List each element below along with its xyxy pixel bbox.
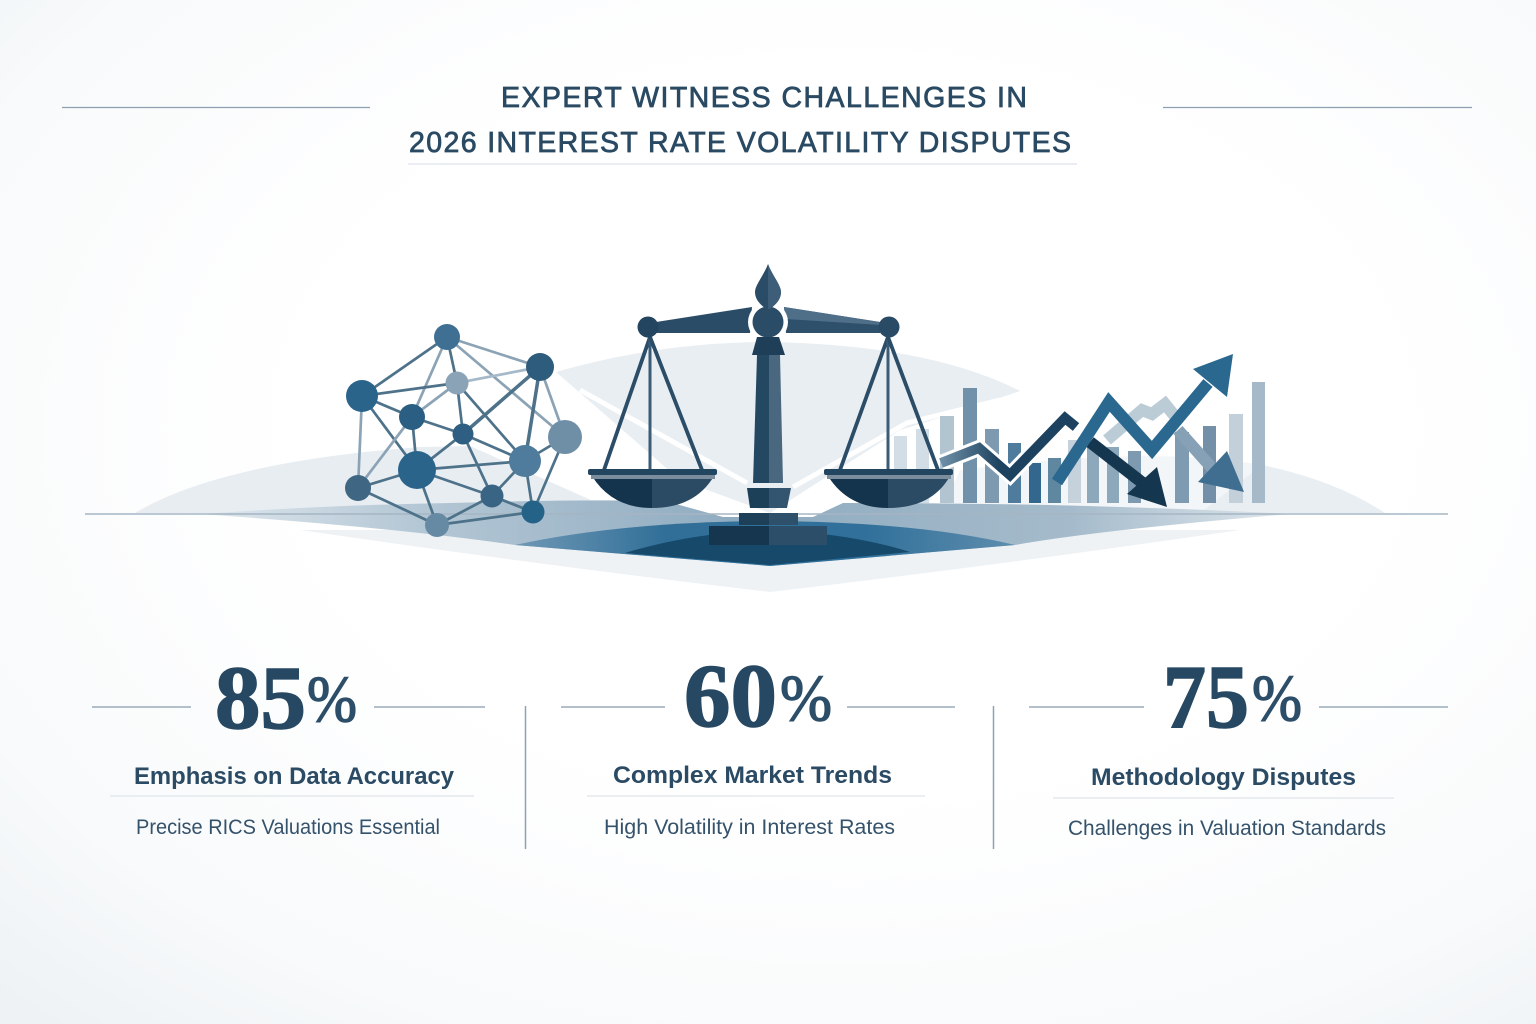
stat: 75%: 75: [1163, 648, 1249, 747]
arrow: dark downward trend: [941, 418, 1167, 507]
panel: data accuracy: Emphasis on Data Accuracy: [134, 763, 455, 790]
stat: 85%: 85: [215, 649, 306, 748]
title: EXPERT WITNESS CHALLENGES IN: [501, 82, 1027, 114]
stat: 60%: %: [780, 662, 832, 735]
panel: methodology disputes: Challenges in Valuation Standards: [1068, 817, 1386, 840]
stat: 75%: %: [1252, 662, 1302, 735]
scale column and base: [709, 337, 827, 545]
arrow: blue upward trend: [1057, 354, 1233, 482]
arrow: pale downward trend: [1107, 404, 1244, 492]
icon: network graph: [345, 324, 582, 537]
panel: data accuracy: Precise RICS Valuations Essential: [136, 816, 440, 839]
scale beam: [638, 264, 900, 342]
panel: methodology disputes: [1029, 648, 1448, 840]
stat: 85%: %: [307, 663, 357, 736]
panel: market trends: High Volatility in Interest Rates: [604, 816, 895, 839]
icon: bar chart: [894, 382, 1265, 503]
panel: market trends: Complex Market Trends: [613, 762, 892, 789]
panel: data accuracy: [92, 649, 485, 839]
scale right pan: [824, 337, 953, 508]
scale left pan: [588, 337, 717, 508]
icon: scales of justice: [588, 264, 953, 545]
panel: methodology disputes: Methodology Disputes: [1091, 764, 1356, 791]
stat: 60%: 60: [684, 647, 777, 746]
title: 2026 INTEREST RATE VOLATILITY DISPUTES: [409, 127, 1071, 159]
divider lines: [526, 706, 994, 849]
central illustration: [85, 264, 1448, 592]
landscape backdrop: [85, 342, 1448, 592]
panel: market trends: [561, 647, 955, 839]
title: [62, 82, 1472, 164]
